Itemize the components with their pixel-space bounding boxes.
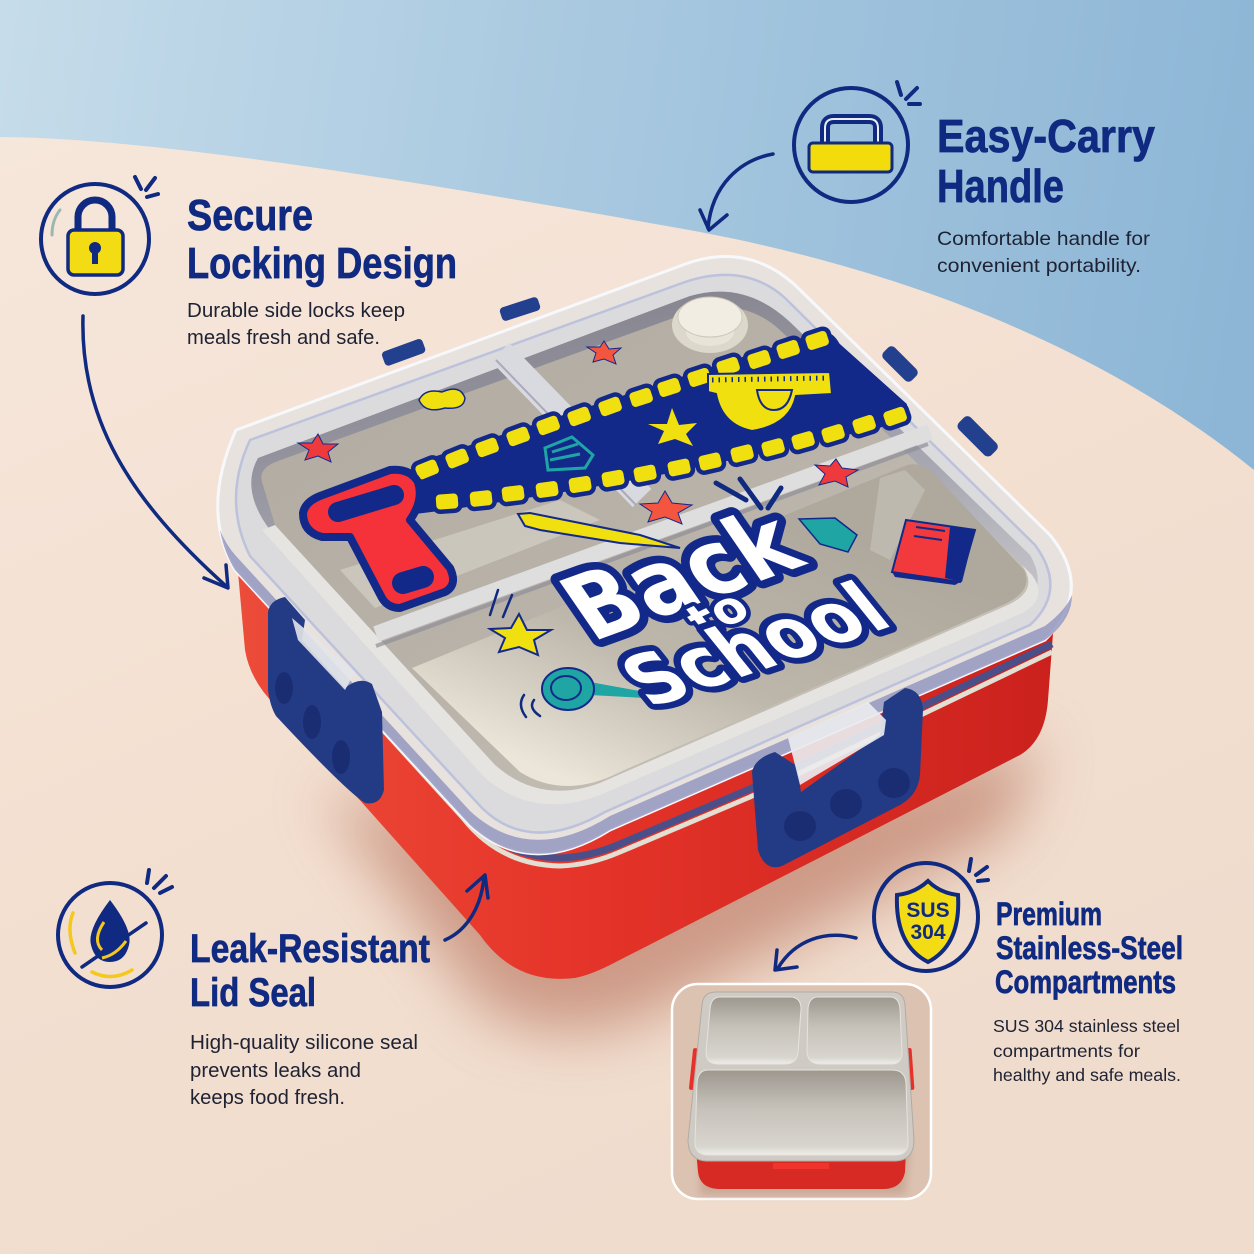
icon: SUS 304 shield — [874, 859, 988, 971]
pencil sticker — [518, 513, 680, 548]
heading: leak-resistant lid seal: Leak-Resistant — [190, 927, 430, 971]
arrow: handle to box — [700, 154, 773, 230]
text: seal description — [190, 1032, 418, 1109]
lid small clips — [381, 296, 1000, 459]
large compartment — [412, 464, 1027, 786]
lid lilac underside — [220, 530, 1072, 854]
heading: easy-carry handle — [937, 110, 1155, 212]
text: locking description — [187, 300, 405, 349]
ruler and protractor — [708, 372, 832, 431]
heading: secure locking design — [187, 191, 457, 288]
saw handle — [303, 470, 453, 608]
sticker title: Back to School: Back — [541, 489, 823, 661]
yellow star — [490, 590, 551, 655]
navy lid gasket — [240, 565, 1052, 858]
text: steel description — [993, 1016, 1181, 1085]
magnifier sticker — [521, 668, 645, 717]
sticker splash — [716, 479, 781, 508]
heading: secure locking design: Locking Design — [187, 239, 457, 288]
icon: SUS 304 shield: 304 — [910, 921, 946, 944]
star yellow on band — [648, 408, 697, 446]
apple sticker — [419, 389, 465, 410]
arrow: locking to box — [83, 316, 228, 588]
sticker title: Back to School: to — [676, 581, 761, 648]
inset: open tray photo — [672, 984, 931, 1199]
icon: padlock — [41, 177, 158, 294]
sticker title: Back to School: School — [604, 568, 907, 723]
compartment highlight — [870, 470, 925, 560]
lid lower rim glass — [262, 525, 1038, 804]
text: steel description: SUS 304 stainless steel — [993, 1016, 1180, 1036]
heading: premium stainless-steel compartments: Stainless-Steel — [996, 930, 1183, 966]
heading: leak-resistant lid seal: Lid Seal — [190, 971, 316, 1015]
text: locking description: meals fresh and safe. — [187, 327, 380, 349]
heading: premium stainless-steel compartments: Premium — [996, 896, 1102, 932]
text: handle description: Comfortable handle for — [937, 228, 1151, 250]
steel interior — [261, 307, 1028, 791]
red book sticker — [892, 520, 975, 585]
heading: easy-carry handle: Handle — [937, 160, 1064, 212]
saw band sticker — [415, 334, 906, 512]
heading: premium stainless-steel compartments: Compartments — [995, 964, 1176, 1000]
heading: leak-resistant lid seal — [190, 927, 430, 1015]
text: steel description: compartments for — [993, 1041, 1140, 1061]
icon: handle — [794, 82, 920, 202]
icon: leak drop — [58, 870, 172, 987]
saw dashes — [414, 330, 908, 510]
arrow: steel to inset — [775, 935, 856, 970]
arrow: seal to box — [445, 875, 488, 940]
notebook doodle on band — [545, 437, 593, 470]
teal book sticker — [799, 518, 857, 552]
text: handle description: convenient portability. — [937, 255, 1141, 277]
steel floor glow — [340, 500, 600, 608]
sticker title: Back to School — [541, 489, 907, 723]
text: seal description: prevents leaks and — [190, 1060, 361, 1082]
lower compartment divider — [376, 432, 930, 634]
lid wall band — [251, 292, 1038, 803]
upper compartment divider — [500, 352, 642, 498]
red base — [236, 550, 1054, 979]
box shadow — [320, 740, 1040, 1032]
stars red — [298, 341, 858, 524]
heading: secure locking design: Secure — [187, 191, 313, 240]
heading: premium stainless-steel compartments — [995, 896, 1183, 1000]
text: seal description: keeps food fresh. — [190, 1087, 345, 1109]
text: handle description — [937, 228, 1151, 277]
heading: easy-carry handle: Easy-Carry — [937, 110, 1155, 162]
lunch box — [218, 256, 1072, 979]
right clip — [752, 688, 923, 867]
button vent — [672, 297, 748, 353]
text: locking description: Durable side locks keep — [187, 300, 405, 322]
text: steel description: healthy and safe meals. — [993, 1065, 1181, 1085]
left clip — [268, 597, 384, 803]
transparent lid — [218, 256, 1071, 854]
steel rim — [240, 573, 1052, 866]
icon: SUS 304 shield: SUS — [906, 899, 950, 922]
lid inner contour — [236, 275, 1050, 833]
text: seal description: High-quality silicone seal — [190, 1032, 418, 1054]
